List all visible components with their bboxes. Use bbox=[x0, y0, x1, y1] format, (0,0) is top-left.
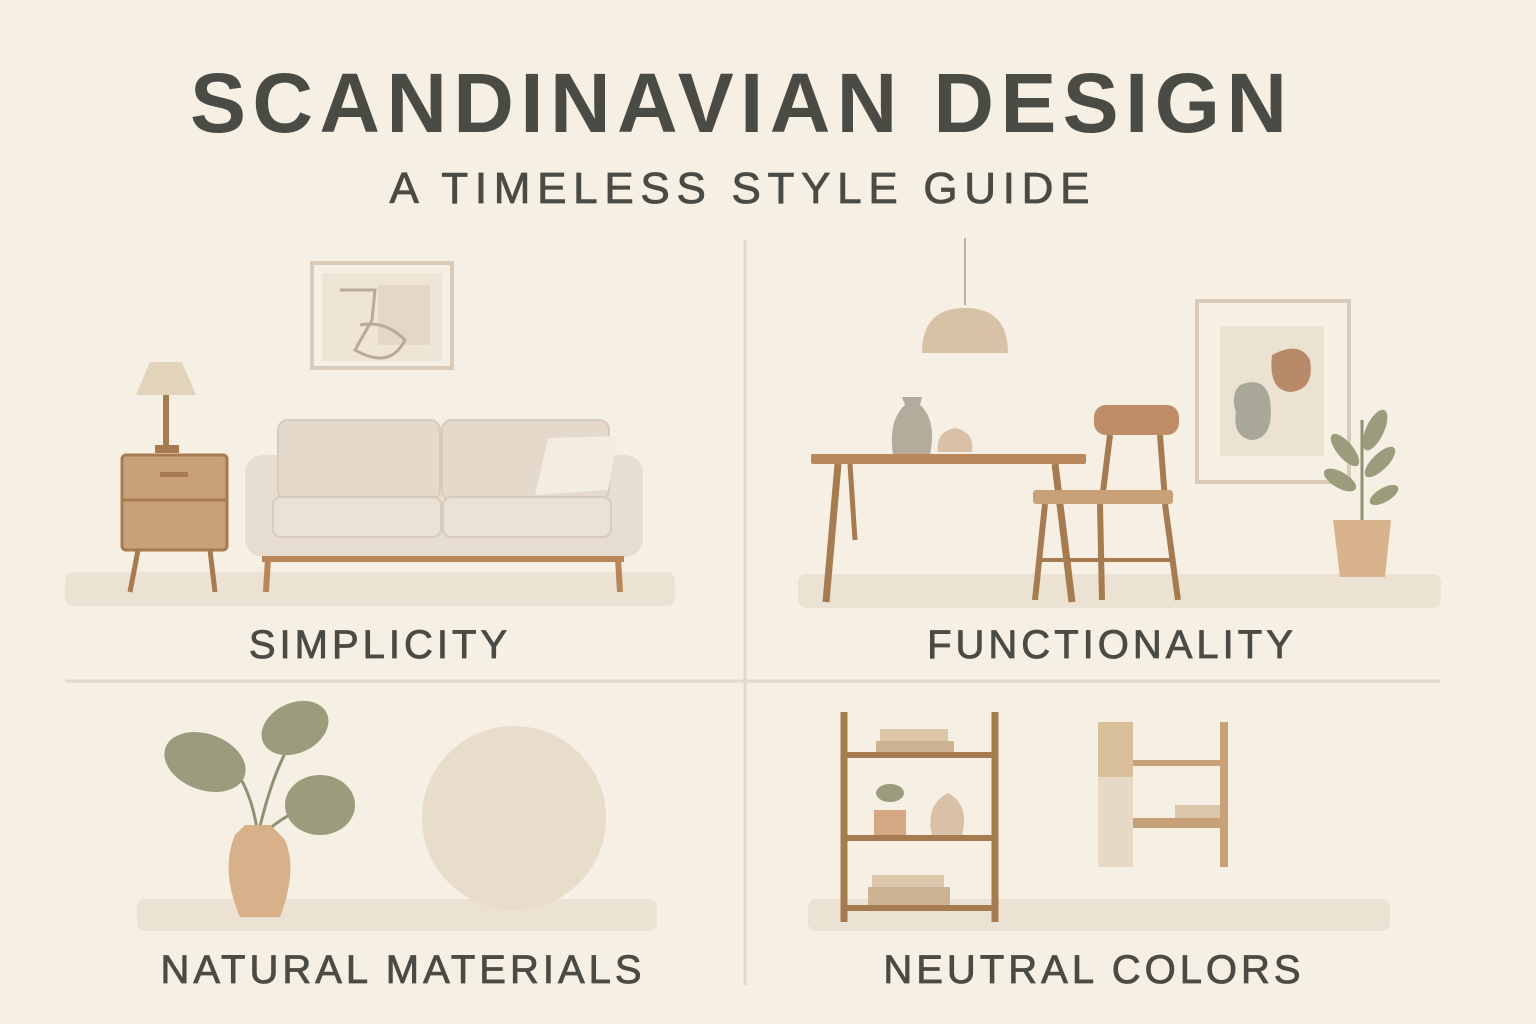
icon: round rug bbox=[422, 726, 606, 910]
subtitle: A TIMELESS STYLE GUIDE bbox=[390, 164, 1094, 213]
title: SCANDINAVIAN DESIGN bbox=[190, 56, 1290, 150]
panel: simplicity bbox=[65, 263, 675, 667]
label: neutral colors: NEUTRAL COLORS bbox=[883, 948, 1305, 992]
icon: lamp and nightstand bbox=[122, 362, 227, 592]
icon: pendant lamp bbox=[922, 238, 1008, 353]
icon: shelf bbox=[844, 712, 995, 922]
icon: monstera plant bbox=[156, 691, 355, 917]
icon: modular shelf bbox=[1098, 722, 1228, 867]
panel: natural materials bbox=[137, 691, 657, 992]
icon: art frame with shapes bbox=[1197, 301, 1349, 482]
icon: sofa bbox=[245, 420, 643, 592]
panel: functionality bbox=[798, 238, 1441, 667]
icon: art frame bbox=[312, 263, 452, 368]
label: natural materials: NATURAL MATERIALS bbox=[160, 948, 646, 992]
panel: neutral colors bbox=[808, 712, 1390, 992]
icon: chair bbox=[1033, 405, 1179, 600]
label: functionality: FUNCTIONALITY bbox=[927, 623, 1297, 667]
icon: table with vases bbox=[811, 397, 1086, 602]
label: simplicity: SIMPLICITY bbox=[249, 623, 511, 667]
icon: potted plant bbox=[1320, 406, 1401, 577]
